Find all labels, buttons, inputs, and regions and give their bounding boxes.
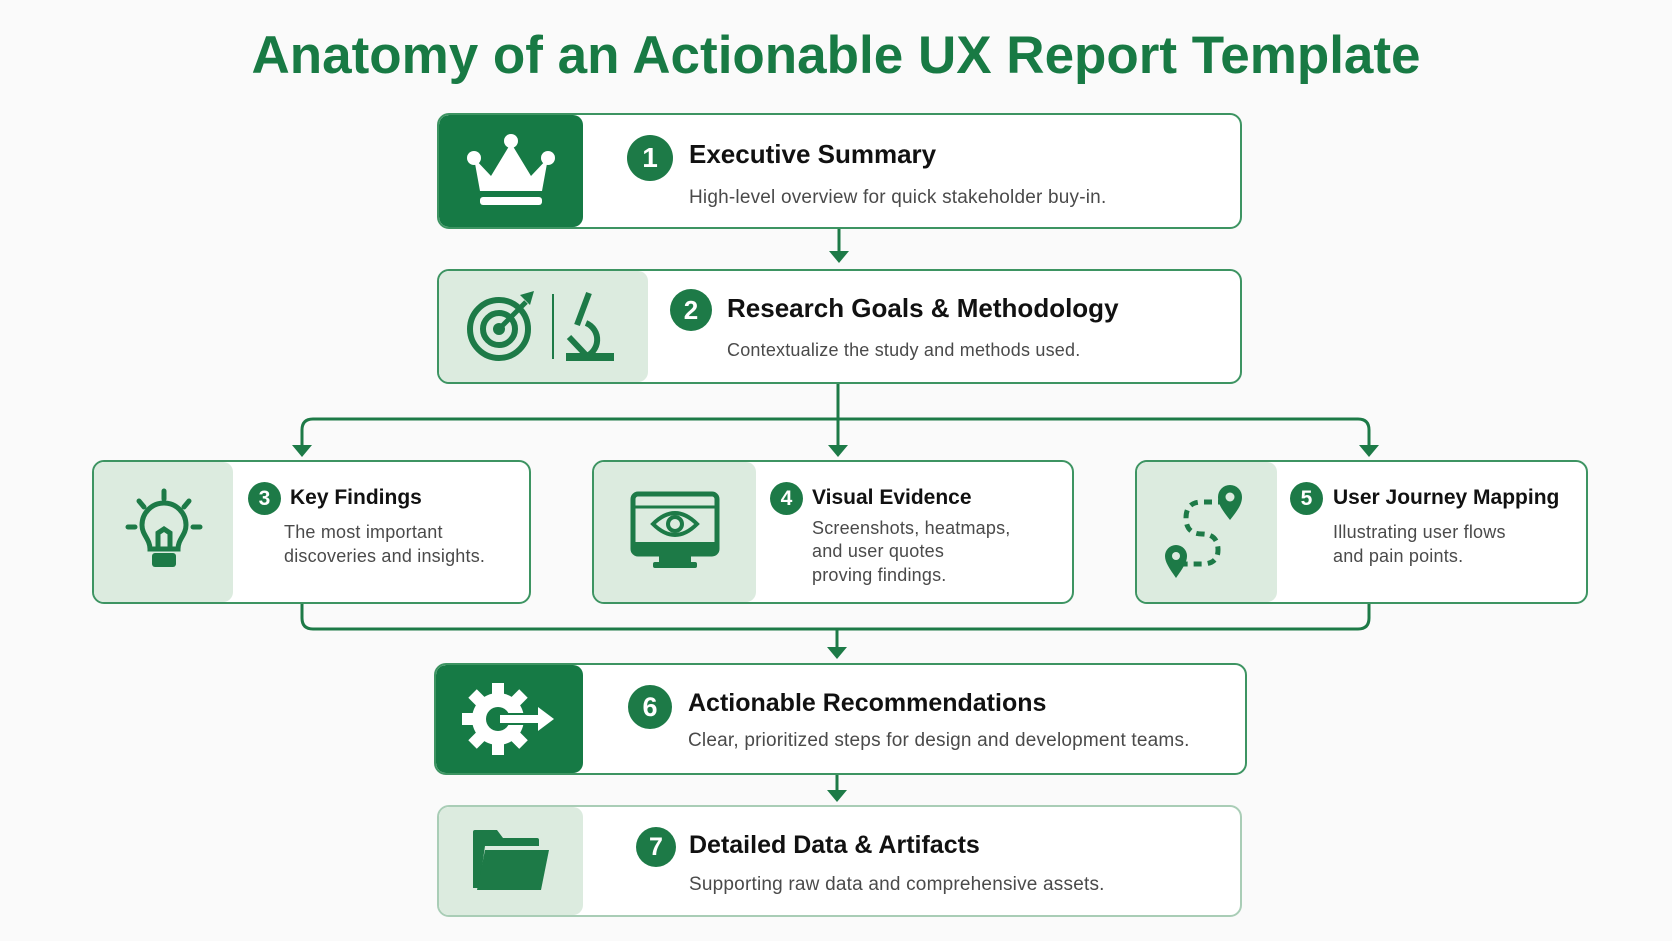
text: Clear, prioritized steps for design and development teams. xyxy=(688,730,1190,751)
panel 6: actionable recommendations xyxy=(434,663,1247,775)
number 2 xyxy=(670,289,712,331)
heading: Key Findings xyxy=(290,486,422,509)
text: discoveries and insights. xyxy=(284,546,485,566)
number 7: 7 xyxy=(649,832,663,860)
text: proving findings. xyxy=(812,565,946,585)
number 3: 3 xyxy=(259,486,270,510)
heading: Visual Evidence xyxy=(812,486,972,509)
icon: crown xyxy=(439,115,583,227)
text: The most important xyxy=(284,522,443,542)
heading: User Journey Mapping xyxy=(1333,486,1559,509)
panel 2: research goals xyxy=(437,269,1242,384)
icon: folder xyxy=(439,807,583,915)
panel 3: key findings xyxy=(92,460,531,604)
heading: Research Goals & Methodology xyxy=(727,293,1119,323)
number 3 xyxy=(248,482,281,515)
text: Contextualize the study and methods used. xyxy=(727,340,1080,360)
text: and pain points. xyxy=(1333,546,1463,566)
text: High-level overview for quick stakeholder buy-in. xyxy=(689,187,1106,208)
panel 1: executive summary xyxy=(437,113,1242,229)
text: Illustrating user flows xyxy=(1333,522,1506,542)
icon: journey path xyxy=(1137,462,1277,602)
panel 4: visual evidence xyxy=(592,460,1074,604)
icon: light bulb xyxy=(94,462,233,602)
number 5: 5 xyxy=(1301,486,1312,510)
number 6: 6 xyxy=(642,692,658,722)
number 4: 4 xyxy=(781,486,792,510)
number 5 xyxy=(1290,482,1323,515)
number 1: 1 xyxy=(642,142,658,173)
icon: target and microscope xyxy=(439,271,648,382)
text: Supporting raw data and comprehensive assets. xyxy=(689,874,1105,895)
number 2: 2 xyxy=(684,294,698,324)
text xyxy=(1333,522,1506,566)
panel 5: user journey mapping xyxy=(1135,460,1588,604)
number 4 xyxy=(770,482,803,515)
text: and user quotes xyxy=(812,541,944,561)
number 6 xyxy=(628,685,672,729)
number 7 xyxy=(636,827,676,867)
text xyxy=(284,522,485,566)
icon: gear with arrow xyxy=(436,665,583,773)
heading: Actionable Recommendations xyxy=(688,689,1046,717)
heading: Executive Summary xyxy=(689,139,936,169)
title: Anatomy of an Actionable UX Report Template xyxy=(251,26,1421,85)
icon: monitor with eye xyxy=(594,462,756,602)
text xyxy=(812,518,1011,585)
heading: Detailed Data & Artifacts xyxy=(689,831,980,859)
panel 7: detailed data xyxy=(437,805,1242,917)
number 1 xyxy=(627,135,673,181)
text: Screenshots, heatmaps, xyxy=(812,518,1011,538)
